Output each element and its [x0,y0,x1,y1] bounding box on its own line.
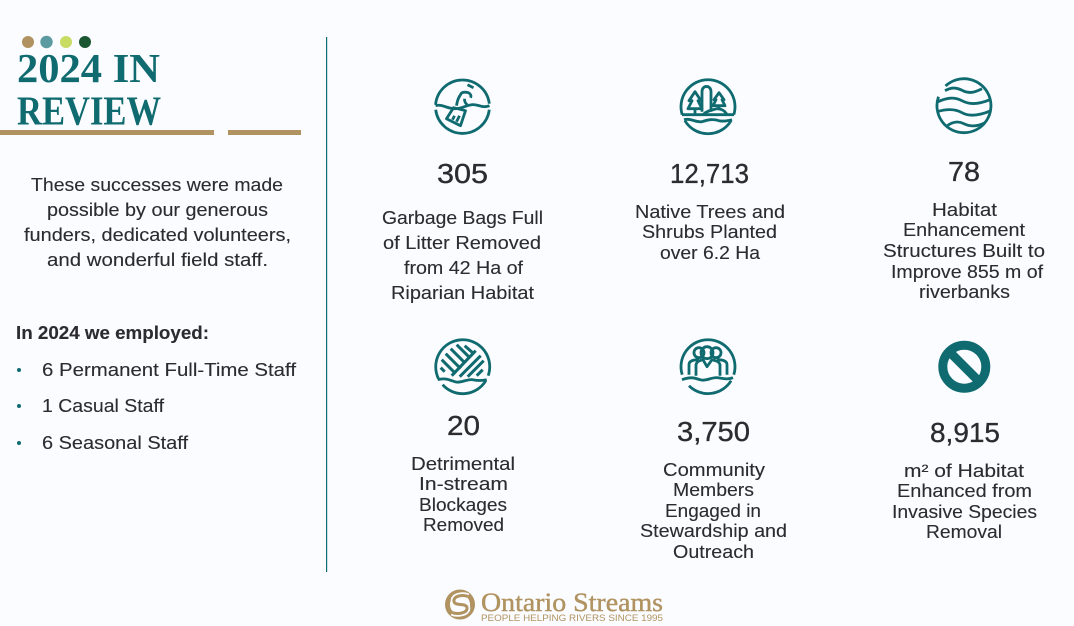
label: blockages: In-stream [419,474,508,494]
title underline bars [0,130,301,135]
number: 12,713: 12,713 [670,158,749,189]
label: blockages: Blockages [419,495,507,515]
label: habitat structures [883,200,1045,302]
label: community [640,460,787,562]
icon: waves [937,79,991,133]
label: garbage bags: Riparian Habitat [391,283,534,303]
text block: thanks: funders, dedicated volunteers, [24,225,291,245]
label: garbage bags: of Litter Removed [383,233,541,253]
label: habitat structures: Structures Built to [883,241,1045,261]
label: habitat structures: Enhancement [903,220,1025,240]
label: trees planted [635,202,785,263]
label: trees planted: Shrubs Planted [642,222,777,242]
panel: blockages stat [411,340,515,535]
text block: staffing list: 6 Seasonal Staff [42,433,189,453]
number: 3,750: 3,750 [677,416,750,447]
text block: staffing list: 1 Casual Staff [42,396,165,416]
logo tagline: PEOPLE HELPING RIVERS SINCE 1995 [481,613,663,624]
label: garbage bags: Garbage Bags Full [382,208,543,228]
icon: hatched blockage over water [436,340,490,394]
text block: thanks [24,175,291,270]
label: invasive species: m² of Habitat [904,461,1024,481]
number: 305: 305 [437,158,488,189]
panel: garbage bags stat [382,80,543,303]
text block: staffing list: 6 Permanent Full-Time Staff [42,360,297,380]
number: 78: 78 [948,156,980,187]
panel: habitat structures stat [883,79,1045,302]
text block: staffing list [16,323,297,453]
label: blockages: Detrimental [411,454,515,474]
number: 20: 20 [447,410,480,441]
title [17,45,161,134]
title: 2024 IN [17,45,160,91]
label: habitat structures: Habitat [932,200,997,220]
icon: people over water [681,340,735,394]
number: 8,915: 8,915 [930,417,1000,448]
text block: staffing list: In 2024 we employed: [16,323,209,343]
text block: thanks: These successes were made [31,175,283,195]
title: REVIEW [17,88,161,134]
label: community: Members [673,480,754,500]
panel: invasive species stat [892,345,1037,542]
label: community: Outreach [673,542,754,562]
label: invasive species [892,461,1037,542]
label: invasive species: Removal [926,522,1002,542]
text block: thanks: and wonderful field staff. [47,250,268,270]
panel: community stat [640,340,787,562]
label: garbage bags [382,208,543,303]
panel: intro sidebar [0,36,301,453]
label: trees planted: Native Trees and [635,202,785,222]
icon: trees and water [681,80,735,134]
panel: trees planted stat [635,80,785,263]
label: garbage bags: from 42 Ha of [404,258,524,278]
label: invasive species: Invasive Species [892,502,1037,522]
label: trees planted: over 6.2 Ha [660,243,761,263]
logo wordmark: Ontario Streams [481,588,663,617]
decorative colour dots [22,36,91,48]
label: habitat structures: riverbanks [919,282,1010,302]
label: habitat structures: Improve 855 m of [891,262,1044,282]
icon: prohibition sign [943,345,986,388]
icon: garbage bag over water [436,80,490,133]
logo: Ontario Streams [448,588,663,624]
label: community: Engaged in [665,501,761,521]
label: blockages [411,454,515,535]
icon: logo mark [448,592,472,617]
label: invasive species: Enhanced from [897,481,1032,501]
text block: thanks: possible by our generous [47,200,268,220]
label: blockages: Removed [423,515,504,535]
label: community: Stewardship and [640,521,787,541]
label: community: Community [663,460,765,480]
